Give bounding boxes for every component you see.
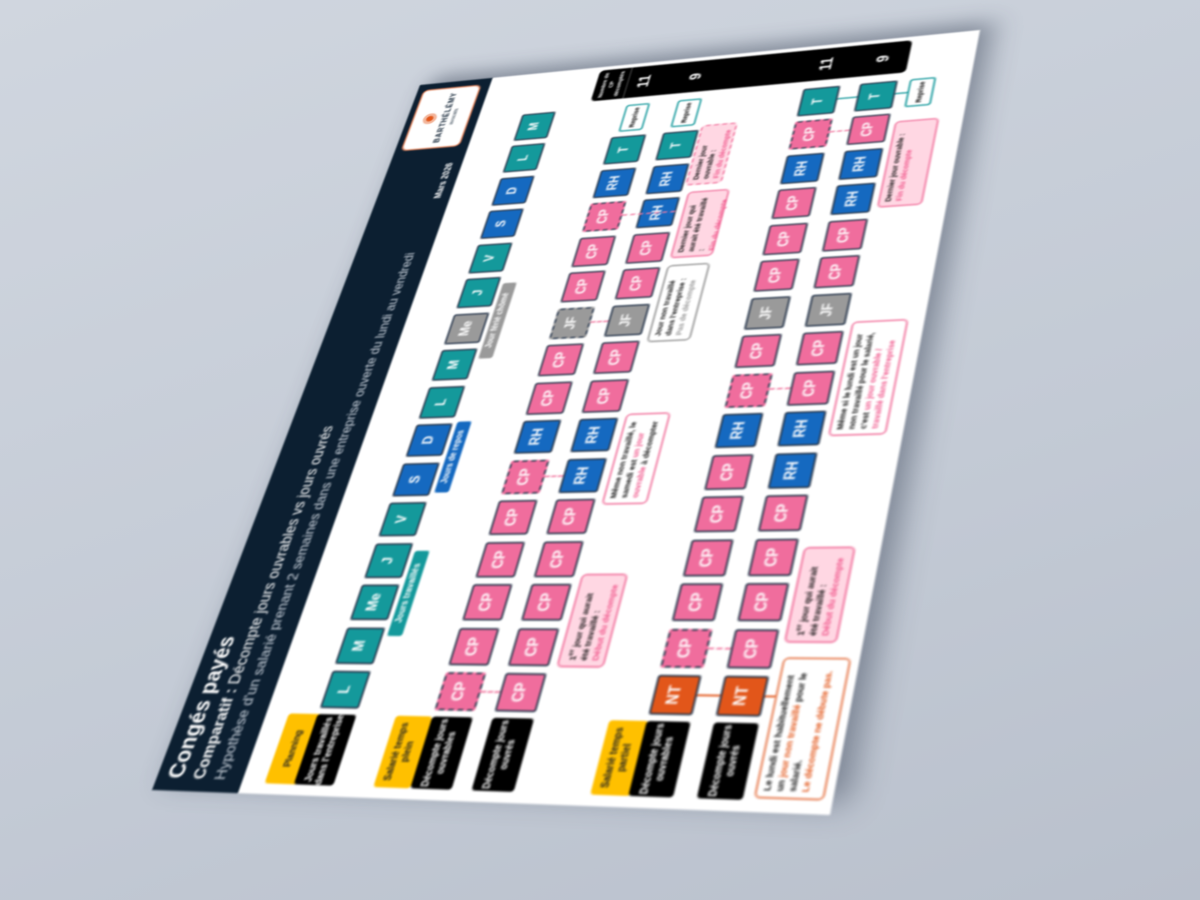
label: FT ouvrés [471,718,534,792]
FT ouvrés row: CP [536,593,556,612]
PT ouvrés row: CP [859,122,877,137]
label: PT ouvrables: Décompte jours ouvrables [639,723,676,795]
callout: FT fin ouvrables: Dernier jour ouvrable : [691,145,718,180]
callout: PT début: Début du décompte [820,558,847,636]
PT ouvrés row: CP [742,639,763,659]
PT ouvrés row: RH [843,190,862,207]
callout: jour férié: Jour non travaillé dans l'entreprise : [653,278,689,336]
FT ouvrables row: CP [463,637,484,656]
label: Salarié temps partiel: Salarié temps partiel [600,727,634,788]
callout: FT fin ouvrés: Dernier jour qui aurait été travaillé : [676,197,710,253]
planning row: Me [364,593,385,611]
callout: PT fin [877,118,939,208]
FT ouvrables row: RH [527,428,547,446]
FT ouvrables row: CP [584,244,603,259]
FT ouvrés row: CP [595,388,615,405]
PT ouvrables row: CP [675,638,697,658]
FT ouvrables row: CP [515,468,535,486]
planning row: L [516,154,531,161]
tag: jour férié chômé [478,282,517,359]
planning row: S [494,220,509,228]
FT ouvrables row: CP [551,352,570,368]
callout: PT lundi [828,319,909,436]
logo: ◉ [417,112,440,125]
FT ouvrés row: CP [606,349,626,366]
PT reprise: Reprise [914,81,927,103]
PT reprise [904,77,936,107]
callout: samedi: Même non travaillé, le samedi est un jour ouvrable à décompter [608,421,661,498]
label: FT ouvrés: Décompte jours ouvrés [482,720,518,789]
PT links [697,694,720,697]
planning row: J [471,289,486,296]
PT ouvrés row: CP [762,548,783,567]
PT ouvrés row: RH [851,156,870,172]
planning row: L [433,398,450,406]
FT ouvrés row: RH [572,466,592,485]
label: Jours travaillés: Jours travaillés dans l'entreprise [304,715,347,785]
label: PT ouvrés: Décompte jours ouvrés [708,725,743,797]
FT ouvrables row: CP [490,551,510,569]
FT ouvrables row: Reprise [627,107,641,128]
FT ouvrés row: CP [560,508,581,525]
label: FT ouvrables: Décompte jours ouvrables [420,719,458,787]
header: nombre de CP: Nombre de CP décomptés [596,71,626,98]
planning row: M [526,122,542,131]
FT ouvrés row [494,98,704,714]
callout: FT fin ouvrés [670,189,730,258]
callout: PT fin: Fin du décompte [894,149,915,201]
PT ouvrables row: JF [758,306,776,320]
callout: FT début: 1er jour qui aurait été travaillé : [566,593,603,661]
planning row: V [482,254,498,262]
PT ouvrables row: CP [776,231,794,247]
value PT ouvrables: 11 [816,57,838,71]
value PT ouvrés: 9 [873,54,894,63]
PT ouvrés row: CP [772,504,793,522]
hypothesis text: Hypothèse d'un salarié prenant 2 semaines dans une entreprise ouverte du lundi au vendredi [211,252,418,780]
tag: jours travaillés [387,551,430,636]
FT ouvrables row: CP [573,279,592,294]
callout: samedi [601,412,671,505]
label: PT ouvrables [628,721,691,797]
document sheet [152,30,980,815]
FT ouvrés row: CP [509,682,531,702]
FT ouvrables row: RH [605,175,623,191]
planning row: S [407,475,424,484]
tag: jours travaillés: Jours travaillés [394,563,423,623]
label: Salarié temps plein [373,716,432,788]
FT ouvrés row: CP [638,240,657,256]
PT ouvrables row: CP [784,195,803,211]
PT ouvrés row: RH [782,461,802,480]
labels column [264,712,760,802]
FT ouvrés row: JF [617,313,636,327]
label: Salarié temps plein: Salarié temps plein [383,722,416,781]
logo [400,84,482,151]
PT ouvrés row: CP [801,379,820,397]
callout: PT début: 1er jour qui aurait été travaillé : [793,567,829,636]
PT ouvrables row: CP [767,267,786,283]
header: nombre de CP [592,68,633,101]
FT ouvrés row: RH [648,205,667,221]
value FT ouvrables: 11 [634,74,655,88]
PT ouvrables row: CP [738,382,758,399]
PT ouvrables row: RH [728,421,749,440]
title: Congés payés [163,636,240,779]
PT ouvrables row: CP [686,593,708,612]
planning row: D [420,436,437,445]
number column [591,40,913,101]
planning row: L [336,685,354,694]
FT ouvrables row: CP [502,509,523,526]
logo: avocats [447,108,460,125]
FT ouvrables row: CP [449,682,471,701]
callout: FT fin ouvrés: Fin du décompte [707,199,730,251]
PT ouvrables row: RH [793,160,811,177]
FT ouvrés row: CP [523,638,544,657]
PT ouvrés row: CP [835,227,854,243]
PT ouvrés row [714,80,900,718]
PT ouvrables row: CP [708,505,729,523]
label: Salarié temps partiel [590,720,649,796]
PT ouvrables row: CP [697,549,718,567]
tag: jours de repos: Jours de repos [440,430,466,484]
FT ouvrés row: T [669,142,684,149]
callout: FT début: Début du décompte [590,585,621,661]
PT ouvrables row: CP [748,342,768,360]
FT ouvrés row: CP [628,275,647,291]
callout: PT début [784,546,856,643]
planning row: J [380,557,397,564]
PT ouvrés row: T [867,92,884,100]
label: Planning [265,713,324,785]
callout: FT fin ouvrables: Fin du décompte [711,129,734,179]
subtitle: Comparatif : Décompte jours ouvrables vs jours ouvrés [190,426,336,780]
planning row [319,110,557,710]
callout: FT début [556,574,629,668]
PT ouvrés row: CP [810,340,829,357]
FT ouvrables row: CP [539,390,559,407]
FT ouvrés row: RH [584,426,604,444]
FT ouvrés row: RH [658,171,676,187]
date: Mars 2026 [432,162,455,199]
tag: jour férié chômé: Jour férié chômé [484,292,511,348]
FT ouvrables row: CP [477,593,497,611]
planning row: Me [457,321,476,337]
header band [152,78,493,793]
PT ouvrés row: RH [791,419,812,438]
tag: jours de repos [434,421,472,493]
PT ouvrables row: CP [801,126,819,142]
callout: PT lundi: Même si le lundi est un jour non travaillé pour le salarié, c'est un jour ouvrable / travaillé dans l'entreprise [835,332,898,430]
label: Planning: Planning [283,730,305,767]
callout: orange NT: Le décompte ne débute pas. [800,671,836,792]
FT dashed links [480,691,500,693]
FT ouvrables row: JF [562,316,581,330]
planning row: V [394,515,411,523]
FT ouvrables row [434,102,651,713]
PT ouvrables row: NT [664,685,685,705]
callout: jour férié [646,263,711,342]
label: PT ouvrés [697,722,759,800]
planning row: M [446,360,463,370]
PT ouvrés row: CP [752,592,773,612]
callout: orange NT [754,657,852,801]
callout: orange NT: Le lundi est habituellement un jour non travaillé pour le salarié. [762,673,810,792]
PT ouvrés row: NT [731,686,753,706]
callout: PT fin: Dernier jour ouvrable : [883,133,907,202]
label: FT ouvrables [410,716,473,790]
PT ouvrables row: T [810,97,826,105]
planning row: M [350,640,369,651]
FT ouvrables row: CP [595,209,613,224]
FT ouvrés row: CP [548,550,569,568]
PT ouvrés row: JF [819,303,837,317]
value FT ouvrés: 9 [686,72,706,81]
callout: jour férié: Pas de décompte [674,280,698,335]
PT ouvrables row [647,84,842,717]
PT ouvrés row: CP [827,263,846,280]
planning row: D [505,187,520,195]
PT ouvrables row: CP [718,463,739,481]
logo: BARTHÉLÉMY [432,92,459,143]
label: Jours travaillés [294,714,357,786]
FT ouvrables row: T [616,146,632,153]
callout: FT fin ouvrables [685,122,738,186]
FT ouvrés row: Reprise [679,102,693,123]
